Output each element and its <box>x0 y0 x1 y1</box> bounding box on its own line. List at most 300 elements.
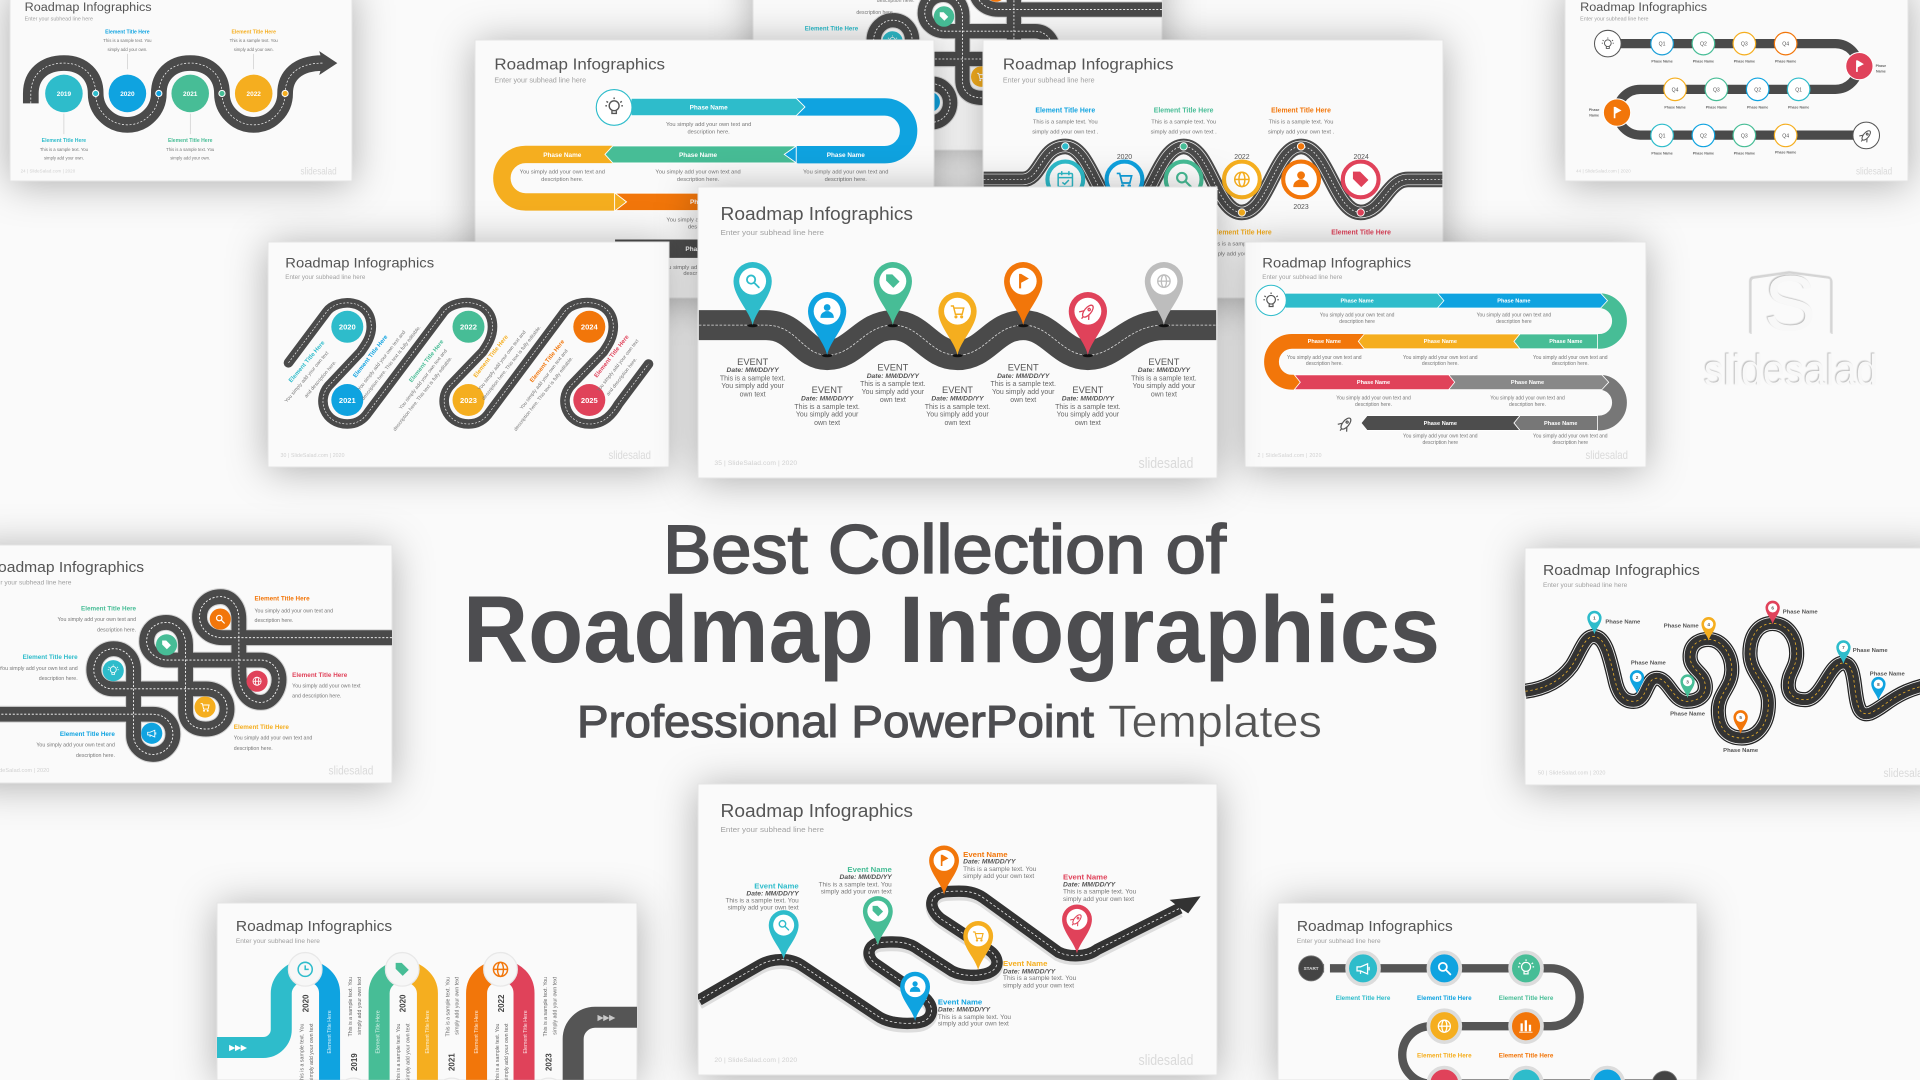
slide: vertical ribbon timeline (bottom left): simply add your own text <box>405 1023 411 1080</box>
slide: winding asphalt road with numbered pins (right): Phase Name <box>1783 609 1818 615</box>
slide: winding road 2019-2022 (top left): Enter your subhead line here <box>25 17 93 23</box>
slide: winding asphalt road with numbered pins (right): Phase Name <box>1870 672 1905 678</box>
slide: quarterly road Q1-Q4 (top right): Phase Name <box>1651 60 1673 64</box>
slide: event pins on road (centre): own text <box>1075 420 1101 427</box>
slide: S-curve road with arrow and pins (bottom centre): 20 | SlideSalad.com | 2020 <box>714 1057 797 1064</box>
slide: start-to-end circle road (bottom right): Element Title Here <box>1417 995 1472 1002</box>
slide: vertical ribbon timeline (bottom left): Enter your subhead line here <box>236 938 320 945</box>
slide: S-curve road with arrow and pins (bottom centre): Date: MM/DD/YY <box>1003 968 1056 975</box>
slide: vertical ribbon timeline (bottom left): 2022 <box>497 994 506 1012</box>
slide: diagonal road 2020-2025 (left): description here. This text is fully editable. <box>481 325 543 402</box>
slide: winding asphalt road with numbered pins (right): 2 <box>1636 675 1639 680</box>
slide: winding asphalt road with numbered pins (right) <box>1525 548 1920 785</box>
slide: quarterly road Q1-Q4 (top right): Phase Name <box>1693 152 1714 156</box>
slide: wave road 2020-2024 (top centre-right): simply add your own text . <box>1328 252 1395 258</box>
slide: phase ribbon with rocket (right): You simply add your own text and <box>1490 396 1565 402</box>
slide: S-curve road with arrow and pins (bottom centre): Event Name <box>938 997 983 1006</box>
slide: quarterly road Q1-Q4 (top right): 44 | SlideSalad.com | 2020 <box>1576 168 1631 173</box>
slide: phase ribbon with rocket (right): You simply add your own text and <box>1403 355 1478 361</box>
slide: diagonal road 2020-2025 (left): You simply add your own text <box>596 338 641 393</box>
slide: event pins on road (centre): slidesalad <box>1139 455 1193 472</box>
slide: vertical ribbon timeline (bottom left): ▶▶▶ <box>228 1043 248 1052</box>
slide: event pins on road (centre): own text <box>945 420 971 427</box>
slide: event pins on road (centre): own text <box>1151 392 1177 399</box>
slide: S-curve road with arrow and pins (bottom centre): Date: MM/DD/YY <box>746 891 799 898</box>
slide: phase ribbon (top centre-left): Phase Name <box>690 105 728 112</box>
slide: S-curve road with arrow and pins (bottom centre): This is a sample text. You <box>725 897 799 904</box>
slide: diagonal road 2020-2025 (left): Element Title Here <box>594 334 631 379</box>
slide: phase ribbon (top centre-left): You simply add your own text and <box>803 169 888 175</box>
slide: event pins on road (centre): Date: MM/DD/YY <box>1138 367 1191 374</box>
slide: diagonal road 2020-2025 (left): You simply add your own text and <box>477 329 528 392</box>
slide: vertical ribbon timeline (bottom left): Element Title Here <box>327 1010 333 1054</box>
slide: wave road 2020-2024 (top centre-right): This is a sample text. You <box>1151 119 1216 125</box>
slide: winding road 2019-2022 (top left): 2022 <box>247 91 261 98</box>
slide: event pins on road (centre): Enter your subhead line here <box>721 228 824 237</box>
slide: quarterly road Q1-Q4 (top right): Q3 <box>1741 42 1748 48</box>
slide: event pins on road (centre): Date: MM/DD/YY <box>1062 396 1115 403</box>
slide: diagonal road 2020-2025 (left): description here. This text is fully editable. <box>513 356 575 432</box>
slide: winding asphalt road with numbered pins (right): Phase Name <box>1664 624 1699 630</box>
slide: woven road loops (left): description here. <box>255 618 293 624</box>
slide: S-curve road with arrow and pins (bottom centre): Event Name <box>1063 873 1108 882</box>
slide: woven road loops (left): You simply add your own text and <box>0 666 78 672</box>
slide: wave road 2020-2024 (top centre-right): This is a sample text. You <box>1269 119 1333 125</box>
slide: winding road 2019-2022 (top left): simply add your own. <box>170 156 210 161</box>
slide: wave road 2020-2024 (top centre-right): slidesalad <box>1374 277 1422 292</box>
slide: event pins on road (centre): EVENT <box>812 385 843 395</box>
slide: phase ribbon (top centre-left): description here. <box>688 225 731 231</box>
slide: quarterly road Q1-Q4 (top right): Phase <box>1589 108 1599 112</box>
slide: S-curve road with arrow and pins (bottom centre): Date: MM/DD/YY <box>938 1007 991 1014</box>
slide: vertical ribbon timeline (bottom left): 2020 <box>302 994 311 1012</box>
slide: woven road loops (left): Element Title Here <box>60 731 115 738</box>
slide: S-curve road with arrow and pins (bottom centre): Event Name <box>754 882 799 891</box>
slide: event pins on road (centre): own text <box>814 420 840 427</box>
slide: phase ribbon with rocket (right): Phase Name <box>1424 339 1457 345</box>
slide: phase ribbon with rocket (right): Phase Name <box>1357 380 1390 386</box>
slide: phase ribbon with rocket (right): description here. <box>1355 402 1392 408</box>
slide: quarterly road Q1-Q4 (top right): Q4 <box>1782 42 1789 48</box>
slide: winding asphalt road with numbered pins (right): 5 <box>1739 715 1742 720</box>
slide: event pins on road (centre): You simply add your <box>862 389 925 396</box>
slide: S-curve road with arrow and pins (bottom centre): Date: MM/DD/YY <box>963 859 1016 866</box>
slide: phase ribbon with rocket (right): You simply add your own text and <box>1533 355 1608 361</box>
slide: event pins on road (centre): You simply add your <box>992 389 1055 396</box>
slide: winding asphalt road with numbered pins (right): 8 <box>1877 682 1880 687</box>
slide: winding asphalt road with numbered pins (right): Phase Name <box>1631 661 1667 667</box>
slide: phase ribbon with rocket (right): Phase Name <box>1308 339 1341 345</box>
slide: wave road 2020-2024 (top centre-right): simply add your own text . <box>1209 252 1275 258</box>
slide: winding road 2019-2022 (top left): This is a sample text. You <box>40 147 89 152</box>
slide: diagonal road 2020-2025 (left): Element Title Here <box>529 339 567 384</box>
slide: event pins on road (centre): Date: MM/DD/YY <box>997 373 1050 380</box>
slide: woven road loops (left): Element Title Here <box>255 595 310 602</box>
slide: phase ribbon with rocket (right): description here <box>1553 440 1588 446</box>
slide: diagonal road 2020-2025 (left): Element Title Here <box>353 334 390 379</box>
slide: phase ribbon with rocket (right): description here <box>1423 440 1458 446</box>
slide: wave road 2020-2024 (top centre-right): Roadmap Infographics <box>1003 55 1174 73</box>
slide: wave road 2020-2024 (top centre-right): Element Title Here <box>1331 229 1391 236</box>
slide: vertical ribbon timeline (bottom left): simply add your own text <box>504 1023 510 1080</box>
slide: winding asphalt road with numbered pins (right): 6 <box>1771 606 1774 611</box>
slide: S-curve road with arrow and pins (bottom centre): Date: MM/DD/YY <box>1063 881 1116 888</box>
slide: event pins on road (centre): This is a sample text. <box>860 381 926 388</box>
slide: event pins on road (centre): own text <box>1010 397 1036 404</box>
slide: start-to-end circle road (bottom right): Roadmap Infographics <box>1297 919 1453 935</box>
slide: S-curve road with arrow and pins (bottom centre): simply add your own text <box>1003 982 1074 989</box>
slide: phase ribbon with rocket (right): You simply add your own text and <box>1287 355 1362 361</box>
slide: phase ribbon (top centre-left): description here. <box>687 130 730 136</box>
slide: winding road 2019-2022 (top left): 2019 <box>57 91 72 98</box>
slide: woven road loops (left): Element Title Here <box>23 654 78 661</box>
slide: event pins on road (centre): EVENT <box>877 363 909 373</box>
slide: phase ribbon with rocket (right): Phase Name <box>1424 421 1457 427</box>
slide: quarterly road Q1-Q4 (top right): Q1 <box>1659 133 1666 139</box>
slide: winding road 2019-2022 (top left): Element Title Here <box>231 29 276 35</box>
slide: phase ribbon (top centre-left): Roadmap Infographics <box>494 55 665 73</box>
slide: wave road 2020-2024 (top centre-right) <box>983 40 1443 298</box>
slide: wave road 2020-2024 (top centre-right): simply add your own text . <box>1032 130 1099 136</box>
slide: event pins on road (centre): Date: MM/DD/YY <box>727 367 779 374</box>
slide: winding road 2019-2022 (top left): Element Title Here <box>105 29 150 35</box>
slide: winding road 2019-2022 (top left) <box>10 0 352 181</box>
slide: phase ribbon (top centre-left): Phase Name <box>827 152 865 159</box>
slide: winding asphalt road with numbered pins (right): Enter your subhead line here <box>1543 582 1628 589</box>
slide: event pins on road (centre): This is a sample text. <box>1131 375 1197 382</box>
slide: event pins on road (centre): You simply add your <box>721 383 785 390</box>
slide: phase ribbon with rocket (right) <box>1245 242 1646 467</box>
slide: event pins on road (centre): You simply add your <box>926 412 989 419</box>
slide: diagonal road 2020-2025 (left): Enter your subhead line here <box>285 275 366 281</box>
slide: wave road 2020-2024 (top centre-right): 2023 <box>1293 204 1309 211</box>
slide: event pins on road (centre) <box>698 187 1217 478</box>
slide: event pins on road (centre): own text <box>880 397 906 404</box>
slide: event pins on road (centre): EVENT <box>1008 363 1039 373</box>
slide: winding road 2019-2022 (top left): 2020 <box>120 91 135 98</box>
slide: woven road loops (left): slidesalad <box>329 764 374 778</box>
slide: S-curve road with arrow and pins (bottom centre): simply add your own text <box>821 889 892 896</box>
slide: event pins on road (centre): Date: MM/DD/YY <box>801 396 854 403</box>
slide: vertical ribbon timeline (bottom left): 2023 <box>545 1053 554 1071</box>
slide: S-curve road with arrow and pins (bottom centre): Enter your subhead line here <box>721 825 824 834</box>
slide: phase ribbon with rocket (right): You simply add your own text and <box>1336 396 1411 402</box>
slide: phase ribbon with rocket (right): Phase Name <box>1340 298 1374 304</box>
slide: S-curve road with arrow and pins (bottom centre): Event Name <box>963 850 1008 859</box>
slide: event pins on road (centre): This is a sample text. <box>794 404 860 411</box>
slide: quarterly road Q1-Q4 (top right): Phase Name <box>1775 151 1796 155</box>
slide: woven road loops (left): You simply add your own text and <box>58 617 136 623</box>
slide: phase ribbon (top centre-left): Phase Name <box>543 152 582 159</box>
slide: event pins on road (centre): This is a sample text. <box>1055 404 1121 411</box>
slide: event pins on road (centre): Roadmap Infographics <box>721 204 913 224</box>
slide: quarterly road Q1-Q4 (top right): Roadmap Infographics <box>1580 0 1707 14</box>
slide: start-to-end circle road (bottom right): START <box>1304 966 1319 971</box>
slide: wave road 2020-2024 (top centre-right): simply add your own text . <box>1268 130 1335 136</box>
slide: woven road loops (left): and description here. <box>292 694 341 700</box>
slide: S-curve road with arrow and pins (bottom centre): simply add your own text <box>938 1021 1009 1028</box>
slide: winding road 2019-2022 (top left): simply add your own. <box>234 47 274 52</box>
slide: phase ribbon with rocket (right): You simply add your own text and <box>1403 434 1478 440</box>
slide: woven road loops (left): You simply add your own text and <box>234 736 312 742</box>
slide: winding road 2019-2022 (top left): simply add your own. <box>107 47 147 52</box>
slide: vertical ribbon timeline (bottom left): simply add your own text <box>357 976 363 1035</box>
slide: wave road 2020-2024 (top centre-right): Element Title Here <box>1271 107 1331 114</box>
slide: quarterly road Q1-Q4 (top right): Q2 <box>1700 133 1707 139</box>
slide: S-curve road with arrow and pins (bottom centre): Event Name <box>1003 959 1048 968</box>
slide: phase ribbon with rocket (right): You simply add your own text and <box>1477 312 1551 318</box>
slide: S-curve road with arrow and pins (bottom centre): This is a sample text. You <box>1003 975 1077 982</box>
slide: start-to-end circle road (bottom right): Element Title Here <box>1499 995 1554 1002</box>
slide: phase ribbon with rocket (right): Phase Name <box>1497 298 1531 304</box>
slide: weave roadmap behind (top centre): Element Title Here <box>805 25 859 32</box>
slide: phase ribbon (top centre-left): Phase Name <box>679 152 718 159</box>
slide: phase ribbon with rocket (right): description here. <box>1422 361 1459 367</box>
slide: start-to-end circle road (bottom right): Element Title Here <box>1336 995 1391 1002</box>
slide: woven road loops (left): description here. <box>76 753 115 759</box>
slide: phase ribbon with rocket (right): Roadmap Infographics <box>1262 255 1411 271</box>
slide: diagonal road 2020-2025 (left): 2024 <box>581 323 599 332</box>
slide: quarterly road Q1-Q4 (top right): Phase Name <box>1788 105 1809 109</box>
slide: quarterly road Q1-Q4 (top right): Phase Name <box>1734 152 1755 156</box>
slide: woven road loops (left): Element Title Here <box>234 724 289 731</box>
heading: Templates: Templates <box>1108 696 1322 747</box>
slide: vertical ribbon timeline (bottom left): Element Title Here <box>425 1010 431 1054</box>
slide: S-curve road with arrow and pins (bottom centre): This is a sample text. You <box>963 866 1037 873</box>
slide: woven road loops (left) <box>0 545 392 783</box>
slide: weave roadmap behind (top centre) <box>753 0 1162 150</box>
slide: wave road 2020-2024 (top centre-right): 2024 <box>1354 154 1369 161</box>
slide: diagonal road 2020-2025 (left): 30 | SlideSalad.com | 2020 <box>280 453 345 459</box>
slide: winding road 2019-2022 (top left): Roadmap Infographics <box>25 0 152 14</box>
slide: diagonal road 2020-2025 (left): You simply add your own text and <box>398 348 449 411</box>
slide: winding asphalt road with numbered pins (right): 50 | SlideSalad.com | 2020 <box>1538 770 1605 776</box>
slide: phase ribbon with rocket (right): description here. <box>1306 361 1343 367</box>
slide: phase ribbon (top centre-left): You simply add your own text and <box>662 265 747 271</box>
slide: phase ribbon (top centre-left): Phase Name <box>685 246 724 253</box>
slide: quarterly road Q1-Q4 (top right): Phase Name <box>1664 105 1686 109</box>
slide: diagonal road 2020-2025 (left): 2022 <box>460 323 477 332</box>
slide: wave road 2020-2024 (top centre-right): This is a sample text. You <box>1033 119 1098 125</box>
slide: wave road 2020-2024 (top centre-right): This is a sample text. You <box>1209 241 1274 247</box>
slide: winding asphalt road with numbered pins (right): Roadmap Infographics <box>1543 563 1700 579</box>
slide: phase ribbon with rocket (right): You simply add your own text and <box>1533 434 1608 440</box>
slide: quarterly road Q1-Q4 (top right): Q1 <box>1659 42 1666 48</box>
slide: quarterly road Q1-Q4 (top right): Q3 <box>1741 133 1748 139</box>
slide: phase ribbon (top centre-left): Phase Name <box>690 199 729 206</box>
slide: phase ribbon with rocket (right): Phase Name <box>1549 339 1583 345</box>
slide: quarterly road Q1-Q4 (top right): Phase Name <box>1693 60 1714 64</box>
slide: quarterly road Q1-Q4 (top right): Q2 <box>1754 87 1761 93</box>
slide: event pins on road (centre): EVENT <box>942 385 973 395</box>
heading: Professional PowerPoint: Professional PowerPoint <box>577 696 1095 747</box>
slide: diagonal road 2020-2025 (left): You simply add your own text and <box>357 329 407 392</box>
slide: phase ribbon with rocket (right): You simply add your own text and <box>1320 312 1395 318</box>
logo: slidesalad embossed watermark: S <box>1764 259 1816 347</box>
slide: event pins on road (centre): You simply add your <box>1057 412 1120 419</box>
slide: start-to-end circle road (bottom right): Enter your subhead line here <box>1297 938 1381 945</box>
slide: woven road loops (left): description here. <box>39 676 78 682</box>
slide: winding road 2019-2022 (top left): 24 | SlideSalad.com | 2020 <box>21 168 76 173</box>
slide: winding road 2019-2022 (top left): This is a sample text. You <box>103 38 152 43</box>
slide: diagonal road 2020-2025 (left): and description here. <box>303 360 338 399</box>
slide: S-curve road with arrow and pins (bottom centre): Roadmap Infographics <box>721 801 913 821</box>
slide: vertical ribbon timeline (bottom left): Roadmap Infographics <box>236 919 392 935</box>
logo: slidesalad embossed watermark <box>1704 259 1878 395</box>
slide: phase ribbon with rocket (right): 2 | SlideSalad.com | 2020 <box>1258 453 1322 459</box>
slide: woven road loops (left): Element Title Here <box>81 606 137 613</box>
slide: vertical ribbon timeline (bottom left): ▶▶▶ <box>597 1013 616 1022</box>
slide: vertical ribbon timeline (bottom left): 2019 <box>350 1053 359 1071</box>
slide: event pins on road (centre): This is a sample text. <box>990 381 1056 388</box>
slide: quarterly road Q1-Q4 (top right): Phase <box>1876 64 1886 68</box>
slide: diagonal road 2020-2025 (left): 2023 <box>460 396 477 405</box>
slide: winding road 2019-2022 (top left): This is a sample text. You <box>230 38 278 43</box>
slide: diagonal road 2020-2025 (left): Roadmap Infographics <box>285 255 434 271</box>
heading: Roadmap Infographics: Roadmap Infographics <box>463 577 1440 683</box>
slide: vertical ribbon timeline (bottom left): This is a sample text. You <box>348 977 354 1036</box>
slide: event pins on road (centre): This is a sample text. <box>720 375 785 382</box>
slide: event pins on road (centre): EVENT <box>1072 385 1104 395</box>
slide: wave road 2020-2024 (top centre-right): simply add your own text . <box>1151 130 1217 136</box>
slide: diagonal road 2020-2025 (left): description here. This text is fully editable. <box>392 356 454 432</box>
slide: S-curve road with arrow and pins (bottom centre): simply add your own text <box>1063 896 1134 903</box>
slide: event pins on road (centre): You simply add your <box>1133 383 1196 390</box>
slide: S-curve road with arrow and pins (bottom centre) <box>698 784 1217 1075</box>
logo: slidesalad embossed watermark: slidesalad <box>1704 346 1878 395</box>
slide: phase ribbon (top centre-left): You simply add your own text and <box>655 169 741 175</box>
slide: diagonal road 2020-2025 (left): Element Title Here <box>288 340 327 384</box>
slide: quarterly road Q1-Q4 (top right): Q2 <box>1700 42 1707 48</box>
slide: winding asphalt road with numbered pins (right): 4 <box>1707 622 1710 627</box>
slide: wave road 2020-2024 (top centre-right): Element Title Here <box>1154 107 1214 114</box>
slide: vertical ribbon timeline (bottom left): 2020 <box>399 994 408 1012</box>
slide: event pins on road (centre): Date: MM/DD/YY <box>867 373 919 380</box>
slide: phase ribbon with rocket (right): description here. <box>1552 361 1589 367</box>
slide: phase ribbon (top centre-left): description here. <box>683 271 726 277</box>
slide: diagonal road 2020-2025 (left): Element Title Here <box>409 339 446 384</box>
slide: phase ribbon (top centre-left): description here. <box>825 177 867 183</box>
slide: S-curve road with arrow and pins (bottom centre): This is a sample text. You <box>819 881 892 888</box>
slide: wave road 2020-2024 (top centre-right): Element Title Here <box>1212 229 1272 236</box>
slide: vertical ribbon timeline (bottom left): This is a sample text. You <box>543 977 549 1036</box>
slide: vertical ribbon timeline (bottom left) <box>217 903 637 1080</box>
slide: quarterly road Q1-Q4 (top right): Q3 <box>1713 87 1720 93</box>
slide: vertical ribbon timeline (bottom left): simply add your own text <box>552 976 558 1035</box>
slide: quarterly road Q1-Q4 (top right) <box>1565 0 1908 181</box>
slide: quarterly road Q1-Q4 (top right): Q1 <box>1795 87 1802 93</box>
slide: vertical ribbon timeline (bottom left): This is a sample text. You <box>445 977 451 1036</box>
slide: winding road 2019-2022 (top left): simply add your own. <box>44 156 84 161</box>
slide: phase ribbon (top centre-left): You simply add your own text and <box>666 122 751 128</box>
slide: wave road 2020-2024 (top centre-right): Element Title Here <box>1035 107 1095 114</box>
slide: woven road loops (left): You simply add your own text and <box>255 608 333 614</box>
slide: winding road 2019-2022 (top left): Element Title Here <box>168 138 213 144</box>
slide: vertical ribbon timeline (bottom left): 2021 <box>448 1053 457 1071</box>
slide: phase ribbon (top centre-left): You simply add your own text and <box>520 169 605 175</box>
slide: phase ribbon (top centre-left): You simply add your own text and <box>666 218 752 224</box>
slide: S-curve road with arrow and pins (bottom centre): simply add your own text <box>963 873 1034 880</box>
slide: wave road 2020-2024 (top centre-right): Enter your subhead line here <box>1003 78 1095 85</box>
slide: start-to-end circle road (bottom right): Element Title Here <box>1417 1053 1472 1060</box>
slide: diagonal road 2020-2025 (left): 2021 <box>339 396 357 405</box>
slide: winding asphalt road with numbered pins (right): Phase Name <box>1605 619 1641 625</box>
slide: S-curve road with arrow and pins (bottom centre): Event Name <box>847 865 892 874</box>
slide: quarterly road Q1-Q4 (top right): Name <box>1876 69 1886 73</box>
slide: event pins on road (centre): own text <box>740 392 766 399</box>
slide: wave road 2020-2024 (top centre-right): 2022 <box>1234 154 1250 161</box>
slide: wave road 2020-2024 (top centre-right): 25 | SlideSalad.com | 2020 <box>997 282 1072 288</box>
slide: S-curve road with arrow and pins (bottom centre): Date: MM/DD/YY <box>840 874 892 881</box>
slide: woven road loops (left): You simply add your own text <box>292 684 361 690</box>
slide: quarterly road Q1-Q4 (top right): Name <box>1589 114 1599 118</box>
slide: vertical ribbon timeline (bottom left): Element Title Here <box>523 1010 529 1054</box>
slide: quarterly road Q1-Q4 (top right): Phase Name <box>1775 60 1796 64</box>
slide: winding asphalt road with numbered pins (right): 1 <box>1593 616 1596 621</box>
slide: diagonal road 2020-2025 (left): 2020 <box>339 323 356 332</box>
slide: woven road loops (left): description here. <box>234 746 273 752</box>
slide: diagonal road 2020-2025 (left): 2025 <box>581 396 599 405</box>
slide: phase ribbon (top centre-left): Enter your subhead line here <box>494 78 586 85</box>
slide: phase ribbon (top centre-left): description here. <box>541 177 584 183</box>
slide: start-to-end circle road (bottom right): Element Title Here <box>1499 1053 1554 1060</box>
slide: woven road loops (left): Element Title Here <box>292 672 348 679</box>
slide: event pins on road (centre): You simply add your <box>796 412 859 419</box>
slide: winding asphalt road with numbered pins (right): Phase Name <box>1853 648 1888 654</box>
slide: diagonal road 2020-2025 (left): You simply add your own text <box>284 350 331 404</box>
slide: S-curve road with arrow and pins (bottom centre): simply add your own text <box>728 905 799 912</box>
slide: vertical ribbon timeline (bottom left): simply add your own text <box>455 976 460 1035</box>
slide: diagonal road 2020-2025 (left): Element Title Here <box>473 334 510 379</box>
slide: phase ribbon with rocket (right): Phase Name <box>1511 380 1544 386</box>
slide: S-curve road with arrow and pins (bottom centre): This is a sample text. You <box>1063 889 1137 896</box>
slide: S-curve road with arrow and pins (bottom centre): This is a sample text. You <box>938 1014 1011 1021</box>
slide: woven road loops (left): You simply add your own text and <box>36 742 115 748</box>
slide: phase ribbon with rocket (right): description here. <box>1509 402 1546 408</box>
slide: winding asphalt road with numbered pins (right): Phase Name <box>1670 712 1706 718</box>
slide: woven road loops (left): description here. <box>97 627 136 633</box>
slide: phase ribbon (top centre-left): description here. <box>677 177 720 183</box>
slide: phase ribbon with rocket (right): description here <box>1339 319 1375 325</box>
slide: diagonal road 2020-2025 (left) <box>268 242 669 467</box>
slide: phase ribbon (top centre-left) <box>475 40 934 298</box>
slide: phase ribbon with rocket (right): Enter your subhead line here <box>1262 275 1343 281</box>
slide: quarterly road Q1-Q4 (top right): Enter your subhead line here <box>1580 17 1649 23</box>
slide: vertical ribbon timeline (bottom left): Element Title Here <box>376 1010 382 1054</box>
slide: phase ribbon with rocket (right): Phase Name <box>1544 421 1577 427</box>
slide: quarterly road Q1-Q4 (top right): Q4 <box>1782 133 1789 139</box>
slide: winding road 2019-2022 (top left): Element Title Here <box>42 138 86 144</box>
slide: start-to-end circle road (bottom right) <box>1278 903 1697 1080</box>
slide: quarterly road Q1-Q4 (top right): Q4 <box>1672 87 1679 93</box>
slide: wave road 2020-2024 (top centre-right): This is a sample text. You <box>1329 241 1394 247</box>
slide: event pins on road (centre): This is a sample text. <box>925 404 990 411</box>
slide: event pins on road (centre): Date: MM/DD/YY <box>931 396 984 403</box>
slide: event pins on road (centre): EVENT <box>737 357 768 367</box>
slide: winding asphalt road with numbered pins (right): 7 <box>1842 645 1845 650</box>
slide: vertical ribbon timeline (bottom left): simply add your own text <box>309 1023 315 1080</box>
slide: winding asphalt road with numbered pins (right): 3 <box>1686 679 1689 684</box>
slide: event pins on road (centre): EVENT <box>1148 357 1180 367</box>
slide: quarterly road Q1-Q4 (top right): Phase Name <box>1734 60 1755 64</box>
slide: vertical ribbon timeline (bottom left): Element Title Here <box>474 1010 480 1054</box>
slide: phase ribbon with rocket (right): description here <box>1496 319 1532 325</box>
slide: event pins on road (centre): 35 | SlideSalad.com | 2020 <box>714 460 797 467</box>
slide: wave road 2020-2024 (top centre-right): 2020 <box>1117 154 1132 161</box>
slide: diagonal road 2020-2025 (left): You simply add your own text and <box>519 348 570 411</box>
slide: winding road 2019-2022 (top left): This is a sample text. You <box>166 147 215 152</box>
slide: quarterly road Q1-Q4 (top right): Phase Name <box>1651 152 1673 156</box>
